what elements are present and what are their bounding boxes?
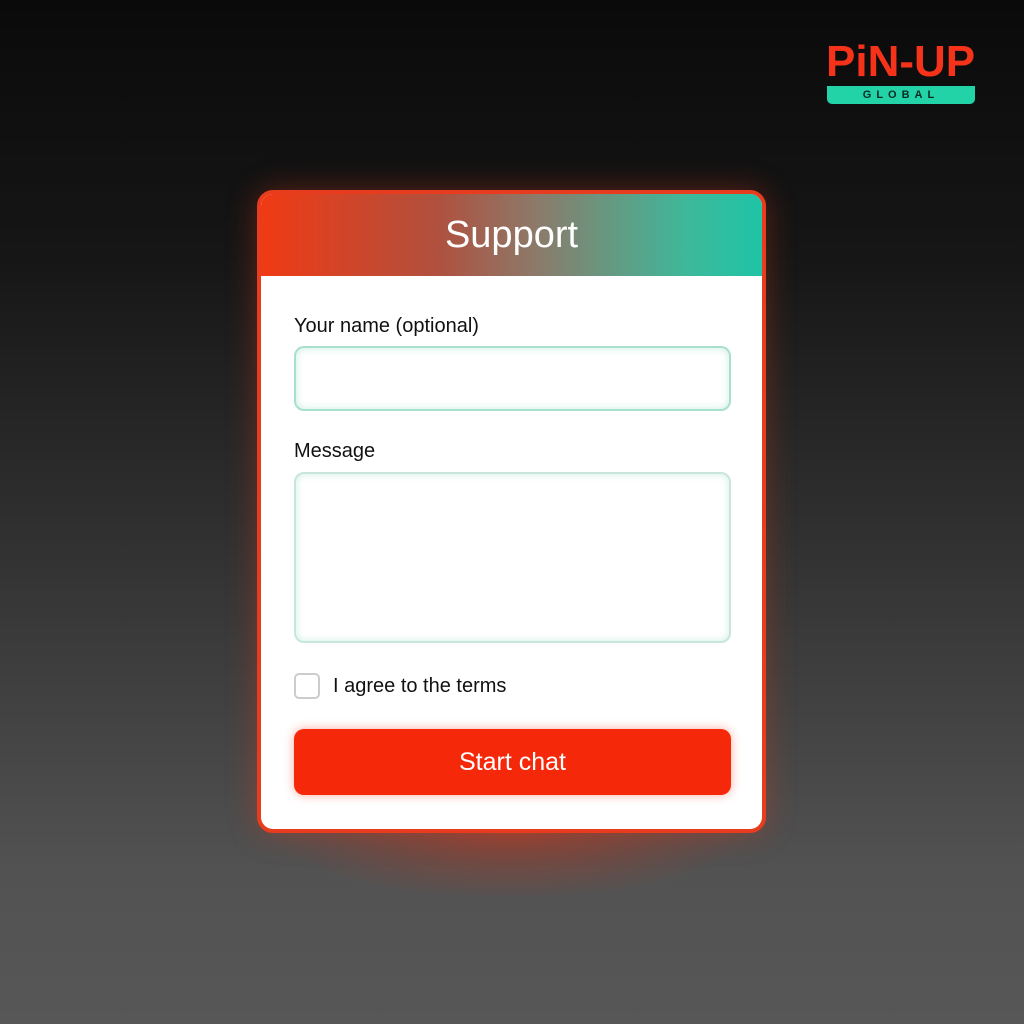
logo: GLOBAL — [863, 89, 939, 101]
name label: Your name (optional) — [294, 315, 479, 337]
terms text: I agree to the terms — [333, 675, 506, 697]
support card — [257, 190, 766, 833]
header: Support — [445, 214, 578, 256]
start chat button: Start chat — [459, 748, 566, 776]
message label: Message — [294, 440, 375, 462]
name input — [294, 346, 731, 411]
start chat button — [294, 729, 731, 795]
message textarea — [294, 472, 731, 643]
logo: PiN-UP — [826, 37, 975, 86]
red glow under card — [270, 760, 750, 900]
header — [261, 194, 762, 276]
checkbox — [294, 673, 320, 699]
